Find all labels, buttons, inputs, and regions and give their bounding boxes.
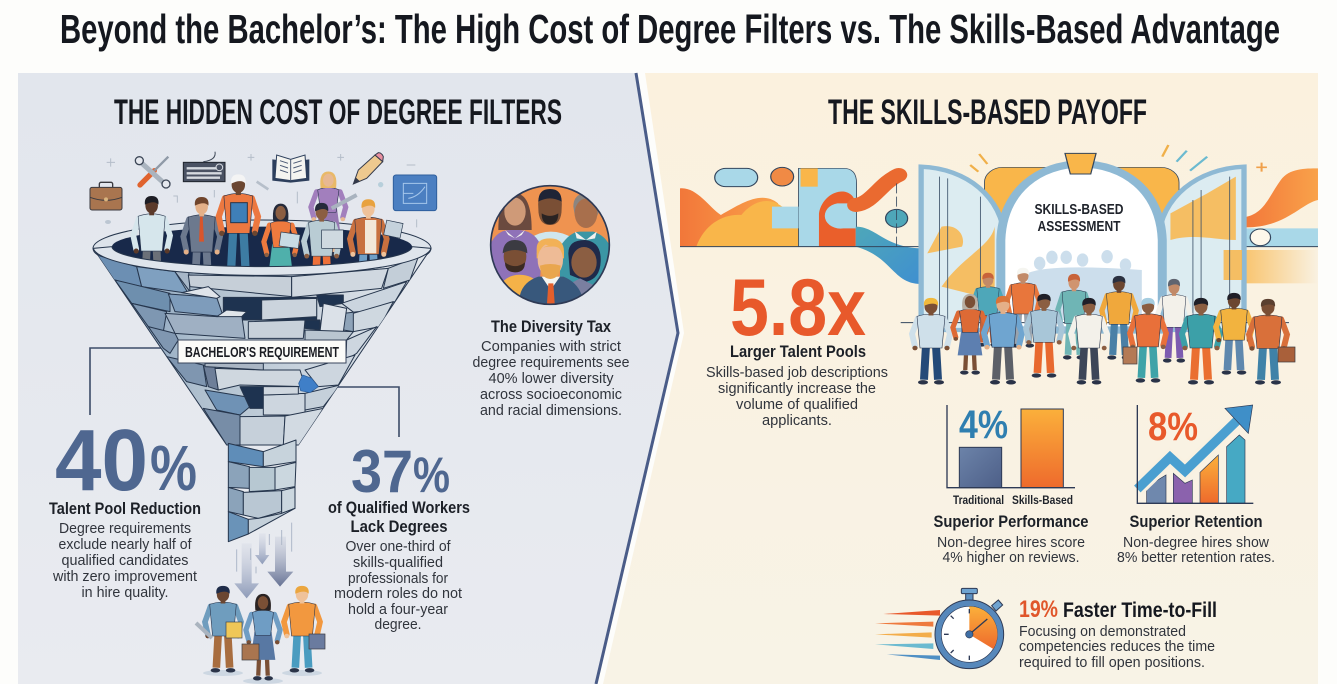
person: man light shirt xyxy=(133,196,170,291)
icon: briefcase xyxy=(90,182,122,210)
abstract blobs right xyxy=(1244,168,1318,283)
icon: diverse group portrait xyxy=(490,186,612,308)
text block: faster time-to-fill: required to fill open positions. xyxy=(1019,654,1205,671)
text: qualified workers body: skills-qualified xyxy=(353,554,443,571)
text block: diversity tax: and racial dimensions. xyxy=(480,402,622,419)
distant crowd xyxy=(1027,250,1142,320)
spandrels xyxy=(984,167,1179,254)
funnel cone xyxy=(93,248,431,445)
funnel with people and icons xyxy=(90,152,437,445)
heading: skills-based payoff: THE SKILLS-BASED PAYOFF xyxy=(828,93,1147,132)
icon: blueprint xyxy=(393,175,437,211)
text block: faster time-to-fill: Faster Time-to-Fill xyxy=(1063,599,1217,622)
text: talent pools body xyxy=(706,364,888,429)
text: talent pool body: with zero improvement xyxy=(52,568,198,585)
text: qualified workers body: modern roles do not xyxy=(334,585,463,602)
text block: diversity tax: Companies with strict xyxy=(481,338,622,355)
stat: 37 percent xyxy=(328,438,470,633)
text block: diversity tax: The Diversity Tax xyxy=(491,317,611,336)
crowd of candidates xyxy=(912,268,1295,385)
icon: blue gem xyxy=(299,375,318,393)
panel: hidden cost of degree filters xyxy=(18,73,678,684)
text: talent pools body: significantly increase the xyxy=(718,380,876,397)
gateway label: SKILLS-BASED xyxy=(1034,201,1124,218)
text block: superior retention: Superior Retention xyxy=(1130,512,1262,531)
heading: hidden cost: THE HIDDEN COST OF DEGREE FILTERS xyxy=(114,93,562,132)
text: talent pool body: exclude nearly half of xyxy=(58,536,192,553)
text block: superior performance: Superior Performance xyxy=(934,512,1088,531)
sparkle accents xyxy=(970,145,1168,172)
doors xyxy=(921,167,1005,330)
text block: faster time-to-fill: Focusing on demonstrated xyxy=(1019,623,1186,640)
funnel opening xyxy=(112,227,412,267)
bar chart: performance: Traditional xyxy=(953,495,1004,507)
person: woman light shirt xyxy=(304,203,339,295)
panel: skills-based payoff xyxy=(596,73,1318,684)
person: hire with wrench xyxy=(205,586,241,673)
text block: superior retention: Non-degree hires show xyxy=(1123,534,1269,551)
person: man brown jacket xyxy=(350,199,387,295)
callout line: qualified workers xyxy=(308,387,399,437)
text block: diversity tax xyxy=(472,317,630,419)
hires emerging from funnel xyxy=(196,586,325,684)
arrows below funnel xyxy=(234,523,293,598)
stat: 5.8x xyxy=(706,263,888,429)
icon: wrench and screwdriver xyxy=(135,157,170,188)
text: qualified workers body: professionals for xyxy=(348,570,448,587)
text block: faster time-to-fill xyxy=(1019,596,1217,671)
bar chart: performance xyxy=(947,403,1075,507)
text: talent pool body: Degree requirements xyxy=(59,520,191,537)
stat: 40 percent: 40 xyxy=(55,412,148,509)
text block: superior performance xyxy=(934,512,1088,566)
arch xyxy=(1001,164,1162,330)
stat: 5.8x: 5.8x xyxy=(730,263,866,353)
stat: 37 percent: 37 xyxy=(351,438,413,505)
text block: superior performance: 4% higher on reviews. xyxy=(942,549,1080,566)
text: qualified workers body: Over one-third of xyxy=(346,538,451,555)
text block: faster time-to-fill: 19% xyxy=(1019,596,1058,623)
text block: superior performance: Non-degree hires score xyxy=(937,534,1085,551)
funnel rim back xyxy=(93,220,431,277)
chart: retention trend: 8% xyxy=(1148,405,1198,449)
icon: open book xyxy=(272,155,309,183)
text block: diversity tax: degree requirements see xyxy=(472,354,630,371)
text: talent pools body: applicants. xyxy=(762,412,832,429)
heading: larger talent pools: Larger Talent Pools xyxy=(730,342,866,361)
stat: 40 percent: % xyxy=(150,432,197,504)
text: qualified workers body: hold a four-year xyxy=(348,601,448,618)
illustration: assessment gateway xyxy=(680,145,1318,330)
icon: stopwatch with speed lines xyxy=(875,588,1004,669)
gateway label xyxy=(1034,201,1124,235)
person: purple woman xyxy=(311,172,346,257)
text: talent pools body: volume of qualified xyxy=(736,396,858,413)
text block: superior retention xyxy=(1117,512,1275,566)
divider chevron xyxy=(596,73,678,684)
stat: 40 percent xyxy=(49,412,201,601)
text: qualified workers body: degree. xyxy=(374,616,422,633)
heading: talent pool reduction: Talent Pool Reduction xyxy=(49,499,201,518)
people on funnel xyxy=(133,172,403,296)
heading: qualified workers: Lack Degrees xyxy=(350,517,448,536)
text: talent pool body: qualified candidates xyxy=(62,552,188,569)
heading: qualified workers xyxy=(328,498,470,536)
person: man grey suit xyxy=(183,197,220,292)
person: hire orange xyxy=(284,586,320,673)
text: talent pool body: in hire quality. xyxy=(82,584,168,601)
gateway label: ASSESSMENT xyxy=(1038,218,1120,235)
icon: degree certificate xyxy=(183,152,225,182)
text: talent pools body: Skills-based job descriptions xyxy=(706,364,888,381)
floor line xyxy=(901,321,1289,324)
heading: qualified workers: of Qualified Workers xyxy=(328,498,470,517)
chart: retention trend xyxy=(1137,405,1253,503)
text block: superior retention: 8% better retention rates. xyxy=(1117,549,1275,566)
abstract blobs left xyxy=(680,167,921,284)
label: bachelor's requirement xyxy=(178,340,346,363)
bar chart: performance: 4% xyxy=(959,403,1008,447)
person: hire with briefcase xyxy=(246,594,280,681)
text: talent pool body xyxy=(52,520,198,601)
text: qualified workers body xyxy=(334,538,463,633)
text block: faster time-to-fill: competencies reduces the time xyxy=(1019,638,1215,655)
keystone xyxy=(1065,153,1096,174)
funnel front rim xyxy=(93,247,431,275)
funnel bricks xyxy=(97,255,418,445)
bar chart: performance: Skills-Based xyxy=(1012,495,1073,507)
label: bachelor's requirement: BACHELOR'S REQUIREMENT xyxy=(185,344,339,361)
person: man orange shirt xyxy=(219,174,258,276)
text block: diversity tax: 40% lower diversity xyxy=(488,370,614,387)
icon: pencil xyxy=(353,153,383,184)
funnel spout xyxy=(228,440,296,542)
callout line: talent pool xyxy=(90,348,170,415)
stat: 37 percent: % xyxy=(413,447,450,503)
person: woman orange top xyxy=(264,204,297,296)
text block: diversity tax: across socioeconomic xyxy=(480,386,622,403)
